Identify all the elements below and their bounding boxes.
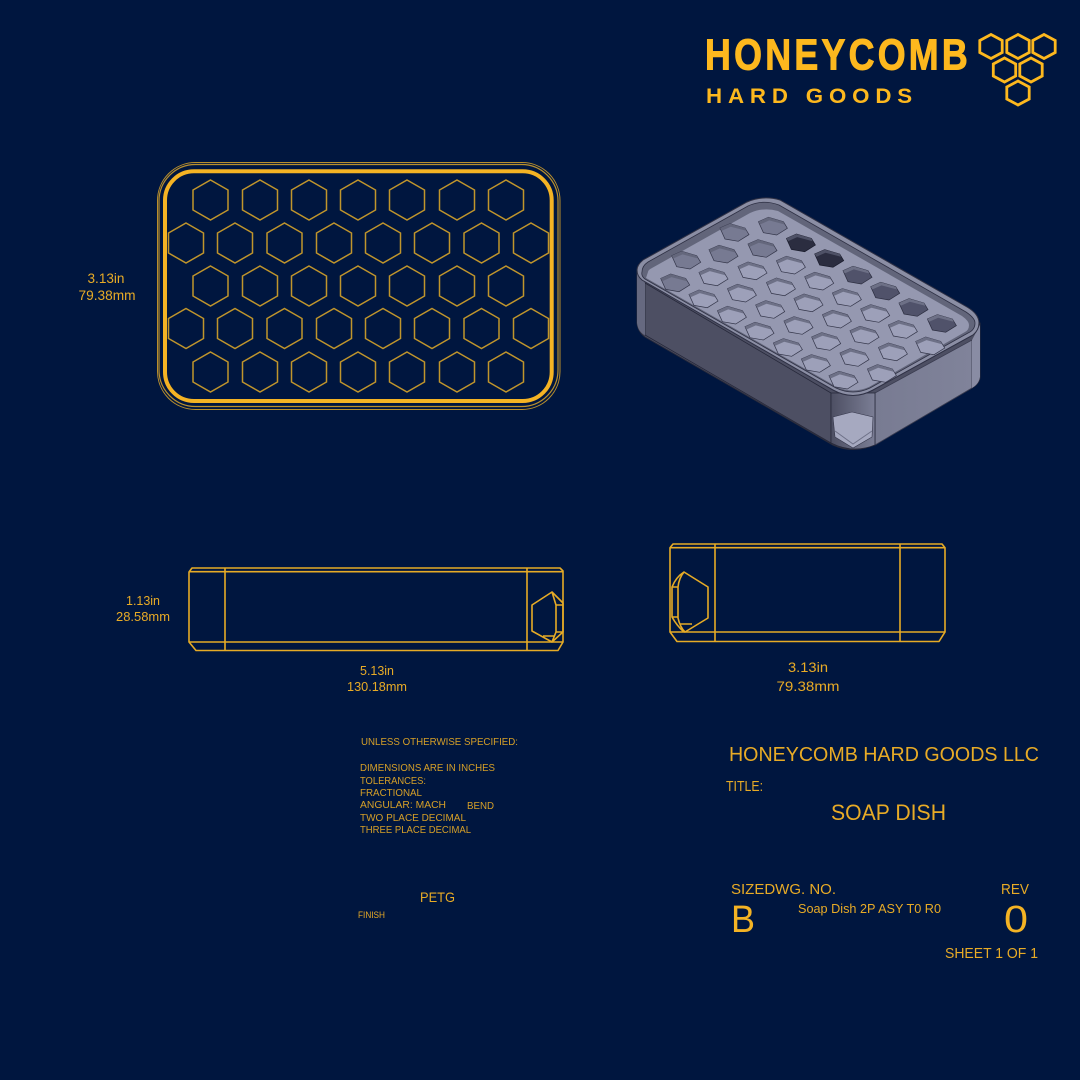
- right corner column: [972, 325, 980, 388]
- vertical edges: [715, 544, 900, 642]
- tolerance notes: TWO PLACE DECIMAL: [360, 812, 466, 824]
- logo subtitle: HARD GOODS: [706, 85, 918, 108]
- hexagon end detail: [672, 572, 708, 632]
- dimension: length: 130.18mm: [347, 679, 407, 694]
- sheet number: SHEET 1 OF 1: [945, 945, 1038, 962]
- outer rim outlines: [158, 162, 560, 410]
- revision label: REV: [1001, 881, 1029, 898]
- dimension: length: 5.13in: [360, 663, 394, 678]
- title label: TITLE:: [726, 778, 763, 795]
- drawing number: Soap Dish 2P ASY T0 R0: [798, 901, 941, 916]
- isometric view of soap dish: [637, 198, 980, 450]
- dimension: top view height: 79.38mm: [78, 288, 136, 303]
- company name: HONEYCOMB HARD GOODS LLC: [729, 744, 1039, 766]
- logo: Honeycomb Hard Goods: [705, 30, 1055, 108]
- logo wordmark: HONEYCOMB: [705, 30, 971, 80]
- right face: [875, 340, 972, 445]
- tolerance notes: TOLERANCES:: [360, 775, 426, 787]
- body outline: [670, 544, 945, 642]
- tolerance notes: THREE PLACE DECIMAL: [360, 824, 471, 836]
- tolerance notes: [360, 736, 518, 836]
- dimension: side height: 1.13in: [126, 593, 160, 608]
- part title: SOAP DISH: [831, 800, 946, 825]
- material: PETG: [420, 889, 455, 905]
- hexagon drain holes: [168, 180, 548, 392]
- tolerance notes: FRACTIONAL: [360, 787, 422, 799]
- tolerance notes: BEND: [467, 800, 494, 812]
- body silhouette: [637, 270, 980, 450]
- floor: [646, 209, 969, 390]
- finish label: FINISH: [358, 910, 385, 920]
- size and drawing number labels: SIZEDWG. NO.: [731, 881, 836, 898]
- top view drawing of soap dish: [158, 162, 560, 410]
- horizontal edges: [189, 572, 563, 642]
- revision value: 0: [1004, 899, 1028, 941]
- dimension: side height: 28.58mm: [116, 609, 170, 624]
- title block: [726, 744, 1039, 962]
- end side view drawing: [670, 544, 945, 642]
- tolerance notes: ANGULAR: MACH: [360, 799, 446, 811]
- left corner column: [637, 272, 645, 335]
- dimension: top view height: [78, 271, 136, 303]
- hexagon holes, isometric: [661, 217, 956, 389]
- left face: [645, 283, 831, 443]
- dimension: width: [776, 659, 840, 694]
- tolerance notes: DIMENSIONS ARE IN INCHES: [360, 762, 495, 774]
- logo icon: honeycomb cells: [980, 34, 1055, 105]
- body outline: [189, 568, 563, 650]
- front corner column: [831, 393, 875, 449]
- dimension: side height: [116, 593, 170, 624]
- inner wall: [642, 202, 975, 392]
- top rim: [637, 198, 979, 396]
- size value: B: [731, 899, 755, 941]
- dimension: width: 3.13in: [788, 659, 828, 675]
- hexagon end detail: [532, 592, 563, 642]
- tolerance notes: UNLESS OTHERWISE SPECIFIED:: [361, 736, 518, 748]
- hexagon end opening: [833, 412, 873, 448]
- vertical edges: [225, 568, 527, 650]
- dimension: length: [347, 663, 407, 694]
- horizontal edges: [670, 548, 945, 632]
- dimension: width: 79.38mm: [776, 678, 840, 694]
- dimension: top view height: 3.13in: [88, 271, 124, 286]
- front side view drawing: [189, 568, 563, 650]
